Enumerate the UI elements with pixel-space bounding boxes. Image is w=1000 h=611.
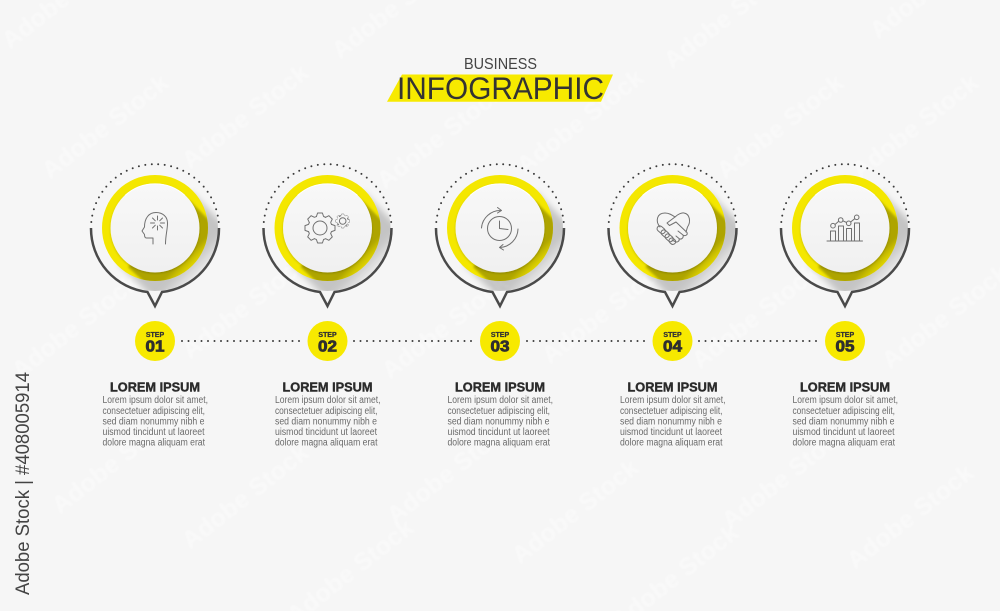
- text block 2: LOREM IPSUM: [282, 380, 372, 394]
- text block 5: uismod tincidunt ut laoreet: [792, 427, 895, 438]
- step marker 4: STEP: [663, 332, 682, 339]
- watermark pattern: Adobe Stock: [846, 69, 984, 185]
- watermark pattern: Adobe Stock: [506, 454, 644, 570]
- icon: head with spark: [142, 212, 168, 244]
- step marker 5: 05: [836, 338, 855, 356]
- watermark pattern: Adobe Stock: [711, 69, 849, 185]
- step marker 4: 04: [663, 338, 682, 356]
- watermark pattern: Adobe Stock: [716, 419, 854, 535]
- watermark pattern: Adobe Stock: [6, 269, 144, 385]
- step marker 3: [480, 321, 520, 361]
- watermark pattern: Adobe Stock: [371, 79, 509, 195]
- watermark pattern: Adobe Stock: [46, 404, 184, 520]
- text block 3: sed diam nonummy nibh e: [448, 416, 550, 428]
- icon: gears: [305, 213, 350, 243]
- text block 2: uismod tincidunt ut laoreet: [275, 427, 377, 438]
- icon: handshake heart: [656, 213, 690, 246]
- watermark pattern: Adobe Stock: [176, 439, 314, 555]
- text block 5: sed diam nonummy nibh e: [792, 416, 895, 428]
- step 2: [263, 164, 424, 448]
- text block 3: LOREM IPSUM: [455, 380, 545, 394]
- watermark pattern: Adobe Stock: [36, 69, 174, 185]
- text block 4: Lorem ipsum dolor sit amet,: [620, 395, 726, 406]
- text block 5: dolore magna aliquam erat: [792, 438, 895, 448]
- text block 5: LOREM IPSUM: [800, 380, 890, 394]
- step 4: [608, 164, 768, 448]
- watermark pattern: Adobe Stock: [536, 254, 674, 370]
- step marker 2: 02: [318, 338, 337, 356]
- watermark pattern: Adobe Stock: [176, 59, 314, 175]
- step 5: [781, 164, 941, 448]
- text block 2: sed diam nonummy nibh e: [275, 416, 377, 428]
- text block 3: [448, 380, 553, 448]
- text block 3: consectetuer adipiscing elit,: [448, 406, 550, 417]
- badge 5: [781, 164, 941, 324]
- step marker 5: STEP: [836, 332, 854, 339]
- text block 2: Lorem ipsum dolor sit amet,: [275, 395, 380, 406]
- text block 4: LOREM IPSUM: [628, 380, 718, 394]
- text block 1: dolore magna aliquam erat: [102, 438, 205, 448]
- text block 5: consectetuer adipiscing elit,: [792, 406, 895, 417]
- text block 4: [620, 380, 726, 448]
- text block 5: [792, 380, 898, 448]
- badge 1: [91, 164, 251, 324]
- text block 5: Lorem ipsum dolor sit amet,: [792, 395, 898, 406]
- icon: bar chart with trend line: [827, 215, 862, 241]
- title main line: INFOGRAPHIC: [397, 70, 604, 106]
- title: [387, 56, 613, 106]
- text block 3: uismod tincidunt ut laoreet: [448, 427, 550, 438]
- title banner: [387, 74, 613, 102]
- text block 1: [102, 380, 208, 448]
- icon: clock with cycle arrows: [482, 208, 518, 250]
- text block 2: [275, 380, 380, 448]
- text block 1: consectetuer adipiscing elit,: [102, 406, 205, 417]
- text block 1: sed diam nonummy nibh e: [102, 416, 205, 428]
- stock id side label: Adobe Stock | #408005914: [13, 372, 34, 595]
- title small line: BUSINESS: [464, 56, 537, 73]
- text block 4: uismod tincidunt ut laoreet: [620, 427, 722, 438]
- step marker 2: [308, 321, 348, 361]
- text block 1: uismod tincidunt ut laoreet: [102, 427, 205, 438]
- text block 3: Lorem ipsum dolor sit amet,: [448, 395, 553, 406]
- text block 2: dolore magna aliquam erat: [275, 438, 378, 448]
- badge 3: [436, 164, 596, 324]
- text block 1: LOREM IPSUM: [110, 380, 200, 394]
- text block 3: dolore magna aliquam erat: [448, 438, 550, 448]
- badge 4: [608, 164, 768, 324]
- watermark pattern: Adobe Stock: [511, 64, 649, 180]
- watermark pattern: Adobe Stock: [176, 249, 314, 365]
- step 1: [91, 164, 251, 448]
- connector dotted lines: [182, 340, 818, 342]
- text block 4: dolore magna aliquam erat: [620, 438, 723, 448]
- step marker 3: STEP: [491, 332, 509, 339]
- badge 2: [263, 164, 424, 324]
- step marker 3: 03: [490, 338, 510, 356]
- step marker 1: 01: [146, 338, 165, 356]
- text block 4: consectetuer adipiscing elit,: [620, 406, 722, 417]
- step marker 1: [135, 321, 175, 361]
- text block 1: Lorem ipsum dolor sit amet,: [102, 395, 208, 406]
- watermark pattern: Adobe Stock: [841, 459, 979, 575]
- step 3: [436, 164, 596, 448]
- watermark pattern: Adobe Stock: [381, 414, 519, 530]
- watermark pattern: Adobe Stock: [376, 269, 514, 385]
- step marker 1: STEP: [146, 332, 164, 339]
- text block 2: consectetuer adipiscing elit,: [275, 406, 378, 417]
- step marker 4: [652, 321, 692, 361]
- step marker 5: [825, 321, 865, 361]
- watermark pattern: Adobe Stock: [686, 259, 824, 375]
- step marker 2: STEP: [318, 332, 337, 339]
- text block 4: sed diam nonummy nibh e: [620, 416, 722, 428]
